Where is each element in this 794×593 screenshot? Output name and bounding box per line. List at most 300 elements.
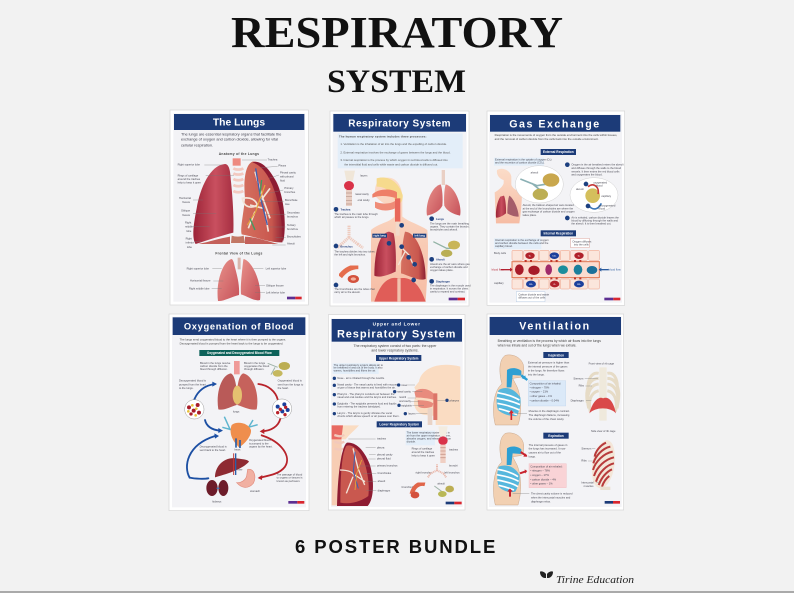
brand mark [287, 297, 302, 299]
frontal view labels: Right middle lobe [189, 286, 210, 290]
lower labels: pleural cavity [377, 452, 393, 456]
rib cage labels: Ribs [579, 384, 585, 388]
label: external respiration [541, 149, 576, 155]
side view labels: muscles [584, 484, 594, 488]
trachea labels [402, 447, 460, 489]
callout: captions: The lungs are the main breathing [430, 221, 470, 225]
intro text: Deoxygenated blood is pumped from the heart back to the lungs to be oxygenated. [180, 341, 283, 345]
inspiration text: into the lungs. [528, 373, 545, 377]
zoom bubble: gas exchange [570, 178, 618, 212]
captions: at the end of the bronchioles are where the [523, 206, 574, 210]
callout: captions: Trachea [340, 208, 351, 212]
lower labels: pleural fluid [377, 457, 391, 461]
intro text [181, 133, 281, 148]
callout: captions: Bronchus [340, 244, 353, 248]
callout: captions: which air passes to the lungs. [334, 215, 369, 219]
anatomy labels: with pleural [280, 174, 294, 178]
anatomy labels: Alveoli [287, 242, 295, 246]
composition: inhaled air: • nitrogen – 78% [530, 386, 550, 390]
capillary diagram: CO₂ [577, 284, 581, 286]
deoxygenated blood circle [185, 400, 204, 419]
trachea labels: help to keep it open [412, 453, 435, 457]
captions: Alveoli, the balloon-shaped air sacs located [523, 203, 574, 207]
heading: frontal view: Frontal View of the Lungs [215, 251, 263, 255]
arrowheads [212, 382, 264, 480]
anatomy labels: Pleural cavity [280, 171, 296, 175]
head profile illustration [414, 365, 460, 425]
intro box: 3. Internal respiration is the process by which oxygen in red blood cells is diffused into [340, 158, 448, 162]
lower description: air from the upper respiratory system, [407, 434, 451, 438]
anatomy labels: Pleura [278, 163, 287, 167]
body labels: larynx [360, 174, 368, 178]
composition: exhaled air: Composition of air exhaled: [530, 464, 563, 468]
capillary diagram: CO₂ [552, 256, 556, 258]
lower labels [377, 437, 398, 492]
trachea labels: alveoli [437, 481, 445, 485]
expiration text [529, 443, 568, 459]
capillary diagram: CO₂ [529, 284, 533, 286]
label: upper: Upper Respiratory System [379, 356, 419, 360]
callout: internal description: capillary blood. [495, 244, 513, 248]
lower labels: diaphragm [378, 488, 391, 492]
captions [523, 162, 624, 226]
flow captions: to organs or tissues is [277, 476, 303, 480]
trachea labels: Rings of cartilage [412, 447, 433, 451]
flow captions: stomach [250, 489, 261, 493]
capillary diagram [512, 250, 599, 289]
captions: Air is exhaled, carbon dioxide leaves the [571, 216, 619, 220]
label: lower: Lower Respiratory System [379, 423, 419, 427]
lung tabs: right lung [374, 234, 386, 238]
brand mark [288, 501, 304, 504]
diagram labels [494, 251, 507, 285]
anatomy labels: Trachea [268, 157, 278, 161]
anatomy labels: lobe [187, 245, 193, 249]
flow captions: Oxygenated blood is [278, 379, 303, 383]
inspiration text [528, 360, 570, 377]
callout: captions: in respiration. It moves the chest [430, 287, 468, 291]
callout: captions [334, 207, 471, 294]
header [490, 317, 621, 335]
trachea labels: bronchi [449, 463, 458, 467]
bundle caption: 6 POSTER BUNDLE [295, 536, 497, 557]
chest cavity text: when the intercostal muscles and [531, 495, 571, 499]
rib cage labels: Diaphragm [571, 398, 584, 402]
frontal view labels: Left superior lobe [266, 266, 287, 270]
intro text [180, 337, 286, 345]
callout: external description: and the excretion of carbon dioxide (CO₂). [495, 161, 545, 165]
callout: captions: bronchioles and alveoli. [430, 227, 458, 231]
callout: external description: External respiration is the uptake of oxygen (O₂) [495, 157, 552, 161]
captions: blood by diffusing through the walls and [571, 219, 618, 223]
kidneys illustration [206, 480, 228, 496]
expiration text: lungs. [529, 455, 536, 459]
header [173, 317, 305, 335]
header: Oxygenation of Blood [184, 321, 294, 331]
flow captions: sent from the lungs to [278, 382, 304, 386]
diaphragm text: the volume of the chest cavity. [529, 417, 564, 421]
lower labels: trachea [377, 437, 386, 441]
exhale arrows [507, 452, 527, 497]
expiration text: the lungs has increased. It now [529, 447, 565, 451]
intro text: Breathing or ventilation is the process by which air flows into the lungs [498, 339, 601, 343]
callout: internal description: Internal respiration is the exchange of oxygen [495, 238, 549, 242]
upper labels: pharynx [450, 398, 460, 402]
intro text: and the removal of carbon dioxide from the cells back into the outside environment. [495, 137, 599, 141]
zoom bubble: gas exchange: blood [599, 207, 606, 211]
alveoli illustration [268, 362, 290, 377]
zoom bubble: gas exchange: deoxygenated [599, 203, 616, 207]
composition: exhaled air: • nitrogen – 78% [530, 469, 551, 473]
anatomy labels: fissure [182, 200, 191, 204]
bronchiole illustration [340, 267, 359, 283]
diagram labels: Body cells [494, 251, 507, 255]
figure: exhaling [493, 433, 524, 505]
callout: oxygen diffuses: into the cells [574, 242, 589, 246]
intro box: The human respiratory system includes three processes: [339, 134, 427, 138]
lung tabs [372, 234, 426, 238]
intro text [354, 344, 437, 353]
rib cage labels: Sternum [573, 376, 584, 380]
anatomy labels: lobe [186, 229, 192, 233]
label: inspiration [543, 352, 569, 358]
flow captions: Blood in the lungs receive [200, 361, 231, 365]
intro text: and lower respiratory systems. [371, 349, 419, 353]
composition: exhaled air: • other gases – 1% [530, 482, 553, 486]
blood flow arrows: blood flow [492, 268, 504, 272]
upper list: Larynx - The larynx is gently vibrates the vocal [337, 411, 392, 415]
anatomy labels: inferior [186, 241, 194, 245]
section bar: Oxygenated and Deoxygenated Blood Flow [207, 351, 272, 355]
label: internal respiration [541, 230, 576, 236]
zoom bubble: alveoli: alveoli [531, 170, 539, 174]
intro text: Respiration is the movements of oxygen from the outside environment into the cells within tissues, [495, 133, 617, 137]
composition: inhaled air: • oxygen – 21% [530, 390, 549, 394]
callout: external description [494, 157, 552, 166]
lungs illustration [218, 361, 257, 410]
upper labels: oral cavity [399, 399, 412, 403]
alveoli illustration [433, 241, 460, 257]
intro text: The lungs are essential respiratory organs that facilitate the [181, 133, 281, 137]
callout: carbon dioxide diffuses: Carbon dioxide and waste [518, 292, 550, 296]
intro box: 2. External respiration involves the exchange of gases between the lungs and the blood. [340, 151, 451, 155]
anatomy labels: fissure [182, 213, 191, 217]
section bar [199, 350, 279, 356]
frontal view labels: Right superior lobe [187, 266, 209, 270]
body labels: oral cavity [358, 198, 370, 202]
lower labels: alveoli [378, 479, 386, 483]
anatomy labels: bronchus [287, 215, 299, 219]
flow captions: pumped from the heart [179, 382, 206, 386]
diaphragm text: Muscles in the diaphragm contract. [529, 409, 570, 413]
upper leader lines [407, 385, 446, 414]
upper description: be breathed in and out of the body. It also [334, 366, 383, 370]
upper list: from entering the trachea (windpipe). [337, 405, 381, 409]
anatomy labels: Tertiary [287, 223, 296, 227]
upper list: Pharynx - The pharynx conducts air between the [337, 392, 395, 396]
composition: exhaled air: • carbon dioxide – 4% [530, 477, 557, 481]
rib cage labels [571, 361, 615, 402]
flow captions: liver [238, 468, 243, 472]
upper labels: nose [401, 384, 408, 387]
callout: captions: carry air to the alveoli. [334, 290, 361, 294]
callout: captions: Lungs [436, 217, 444, 221]
zoom bubble: alveoli [515, 166, 563, 203]
flow captions: heart [234, 448, 241, 452]
header [332, 319, 462, 342]
lower labels: bronchioles [378, 471, 392, 475]
zoom bubble: gas exchange: alveoli [576, 187, 584, 191]
upper list: nasal and oral cavities and the larynx and trachea. [337, 395, 397, 399]
upper labels: epiglottis [401, 403, 412, 407]
anatomy labels: bronchus [287, 227, 299, 231]
anatomy labels: fluid [280, 179, 285, 183]
icon: butterfly [540, 571, 553, 578]
side lungs illustration [427, 170, 460, 216]
side view leader lines [588, 449, 599, 483]
rib cage front illustration [587, 367, 619, 421]
rib leader lines [585, 379, 598, 401]
label: external respiration: External Respiration [543, 150, 574, 154]
heart illustration [222, 417, 258, 448]
flow captions: is pumped to the [249, 441, 269, 445]
upper list: a type of tissue that warms and humidifies the air. [337, 386, 396, 390]
flow captions: The passage of blood [277, 472, 303, 476]
lung tabs: left lung [415, 234, 425, 238]
upper list: Epiglottis - The epiglottis prevents food and liquids [337, 402, 397, 406]
diaphragm text [529, 409, 570, 421]
intro text: The respiratory system consist of two parts: the upper [354, 344, 437, 348]
captions: and diffuses through the walls to the blood [571, 166, 622, 170]
side view labels: Intercostal [581, 480, 594, 484]
leader line [514, 412, 527, 414]
inhale arrows [509, 375, 527, 420]
intro text: The lungs send oxygenated blood to the heart where it is then pumped to the organs. [180, 337, 286, 341]
anatomy labels: middle [185, 225, 193, 229]
brand mark [446, 502, 462, 504]
callout: internal description [494, 238, 549, 249]
liver illustration [215, 453, 249, 477]
header [333, 114, 466, 132]
blood flow arrows [187, 384, 287, 479]
header: Ventilation [519, 321, 591, 333]
captions: the alveoli. It is then breathed out. [571, 222, 611, 226]
anatomy labels: Primary [284, 186, 294, 190]
captions: and oxygenates the blood. [571, 173, 603, 177]
flow captions: Blood in the lungs [244, 361, 266, 365]
trachea labels: trachea [449, 448, 458, 452]
numbered markers [387, 223, 417, 282]
upper labels: nostril [399, 395, 406, 399]
upper labels: nasal cavity [397, 390, 412, 394]
poster: Oxygenation of Blood [169, 314, 309, 511]
capillary diagram: O₂ [529, 256, 531, 258]
anatomy labels: Right superior lobe [178, 163, 200, 167]
intro text: cellular respiration. [181, 144, 213, 148]
callout: captions: The trachea is the main tube through [334, 212, 378, 216]
anatomy labels: Right [185, 221, 191, 225]
lower description: The lower respiratory system pulls in [407, 431, 450, 435]
body figure [495, 169, 522, 223]
captions: gas exchange of carbon dioxide and oxygen [523, 210, 575, 214]
stomach illustration [237, 469, 255, 487]
anatomy labels: Secondary [287, 211, 300, 215]
upper list [333, 376, 400, 418]
anatomy leader lines [193, 160, 286, 245]
brand name: Tirine Education [556, 574, 635, 586]
header [174, 114, 304, 130]
upper list: chords which allows speech or air passes over them. [337, 414, 400, 418]
frontal leader lines [212, 269, 265, 292]
blood flow arrows: blood flow [609, 268, 621, 272]
header: Gas Exchange [509, 118, 601, 130]
diagram labels: capillary [494, 281, 504, 285]
capillary diagram: O₂ [578, 256, 580, 258]
expiration text: causes air to flow out of the [529, 451, 562, 455]
poster: Gas Exchange [487, 111, 625, 305]
bronchiole illustration [411, 484, 425, 498]
callout: captions: The diaphragm is the muscle used [430, 284, 471, 288]
zoom bubble: gas exchange: oxygenated [593, 181, 608, 185]
frontal view labels [187, 266, 287, 294]
side view labels: Side view of rib cage [591, 429, 616, 433]
bronchi illustration [428, 464, 446, 478]
blood flow arrows [492, 268, 621, 272]
rib cage labels: Front view of rib cage [589, 361, 615, 365]
callout: internal description: and carbon dioxide between the cells and the [495, 241, 549, 245]
label: lower [377, 421, 422, 427]
inspiration text: External air pressure is higher than [528, 360, 570, 364]
bronchus illustration [337, 226, 363, 248]
flow captions: kidneys [212, 499, 222, 503]
bottom edge strip [0, 591, 794, 593]
composition: inhaled air: • carbon dioxide – 0.04% [530, 398, 560, 402]
flow captions: known as perfusion. [277, 479, 301, 483]
upper list: Nose - air is inhaled through the nostrils. [337, 376, 385, 380]
anatomy labels: Oblique [181, 209, 191, 213]
callout: carbon dioxide diffuses [516, 292, 550, 302]
callout: captions: Alveoli [436, 258, 445, 262]
lower description: absorbs oxygen, and releases carbon [407, 437, 451, 441]
upper description [333, 363, 383, 374]
flow captions: lungs [233, 410, 240, 414]
flow captions: through diffusion. [244, 367, 265, 371]
lower leader lines [348, 439, 376, 491]
intro text [498, 339, 601, 348]
flow captions: Oxygenated blood [249, 438, 271, 442]
flow captions: blood through diffusion. [200, 367, 228, 371]
leader line [513, 492, 529, 494]
flow captions: to the lungs. [179, 386, 194, 390]
flow captions: Deoxygenated blood is [179, 379, 207, 383]
composition: inhaled air: Composition of air inhaled: [530, 381, 561, 385]
frontal view labels: Horizontal fissure [190, 279, 211, 283]
anatomy labels: Right [186, 237, 192, 241]
intro box: the interstitial fluid and cells while waste and carbon dioxide is diffused out. [344, 162, 438, 166]
brand mark [604, 298, 620, 300]
intro box: 1. Ventilation is the inhalation of air into the lungs and the expelling of carbon dioxide. [340, 142, 447, 146]
intro box [338, 133, 463, 168]
inspiration text: the internal pressure of the gases [528, 364, 568, 368]
heading: anatomy: Anatomy of the Lungs [219, 152, 259, 156]
poster: Upper and Lower Respiratory System [328, 315, 465, 510]
callout: oxygen diffuses [571, 238, 592, 248]
callout: captions: the left and right bronchus. [334, 253, 366, 257]
composition: inhaled air [528, 381, 566, 406]
lower labels: pleura [377, 445, 385, 449]
rib cage side illustration [592, 440, 615, 490]
callout: oxygen diffuses: Oxygen diffuses [572, 239, 592, 243]
frontal view lungs [218, 258, 260, 301]
side view labels: Sternum [581, 446, 592, 450]
body labels [355, 174, 370, 202]
captions: Oxygen in the air breathed enters the alveoli [571, 163, 624, 167]
trachea labels: around the trachea [412, 450, 434, 454]
anatomy labels: tree [285, 202, 290, 206]
composition: inhaled air: • other gases – 1% [530, 394, 553, 398]
trachea labels: bronchioles [402, 485, 416, 489]
anatomy labels: around the trachea [178, 177, 200, 181]
callout: carbon dioxide diffuses: diffuses out of the cells [518, 296, 546, 300]
label: expiration: Expiration [548, 434, 564, 438]
label: upper [376, 355, 421, 361]
callout: captions: oxygen takes place. [430, 268, 454, 272]
brand mark [449, 298, 465, 300]
upper list: Nasal cavity - The nasal cavity is lined with mucosa, [337, 383, 399, 387]
lower description: dioxide. [407, 440, 416, 444]
callout: captions: The bronchioles are the tubes that [334, 287, 375, 291]
frontal view labels: Left inferior lobe [266, 290, 286, 294]
flow captions: Deoxygenated blood is [200, 445, 227, 449]
alveoli illustration [434, 486, 454, 497]
intro text: when we inhale and out of the lungs when we exhale. [498, 344, 577, 348]
callout: captions: The trachea divides into two tubes: [334, 250, 376, 254]
brand mark [605, 501, 620, 504]
flow captions: sent back to the heart. [200, 448, 226, 452]
anatomy diagram: lungs [193, 158, 285, 244]
oxygenated blood circle [272, 399, 292, 418]
anatomy labels: Bronchiole [285, 198, 298, 202]
intro text: exchange of oxygen and carbon dioxide, allowing for vital [181, 138, 278, 142]
trachea illustration [438, 426, 448, 463]
header [490, 115, 620, 132]
figure: inhaling [493, 355, 524, 425]
callout: captions: cavity to expand and contract. [430, 290, 466, 294]
zoom bubble: gas exchange: blood [596, 184, 603, 188]
callout: captions: organs. They contain the bronchi, [430, 224, 470, 228]
flow captions: organs by the heart. [249, 445, 273, 449]
trachea labels: right bronchus [416, 470, 433, 474]
subtitle: SYSTEM [327, 64, 466, 100]
poster: The Lungs [170, 110, 308, 305]
intro text [495, 133, 617, 141]
lower description [406, 431, 451, 445]
callout: captions: exchange of carbon dioxide and [430, 265, 468, 269]
header: Respiratory System [337, 328, 456, 340]
expiration text: The internal pressure of gases in [529, 443, 568, 447]
composition: exhaled air: • oxygen – 17% [530, 473, 549, 477]
frontal view labels: Oblique fissure [266, 283, 284, 287]
anatomy labels: Rings of cartilage [178, 173, 199, 177]
label: inspiration: Inspiration [548, 353, 564, 357]
chest cavity text: The chest cavity volume is reduced [531, 491, 573, 495]
zoom bubble: gas exchange: capillary [601, 194, 612, 198]
capillary diagram: O₂ [553, 284, 556, 286]
poster: Ventilation [487, 314, 624, 510]
anatomy labels: bronchus [284, 190, 296, 194]
composition: exhaled air [529, 464, 566, 488]
lower lung illustration [332, 425, 373, 506]
